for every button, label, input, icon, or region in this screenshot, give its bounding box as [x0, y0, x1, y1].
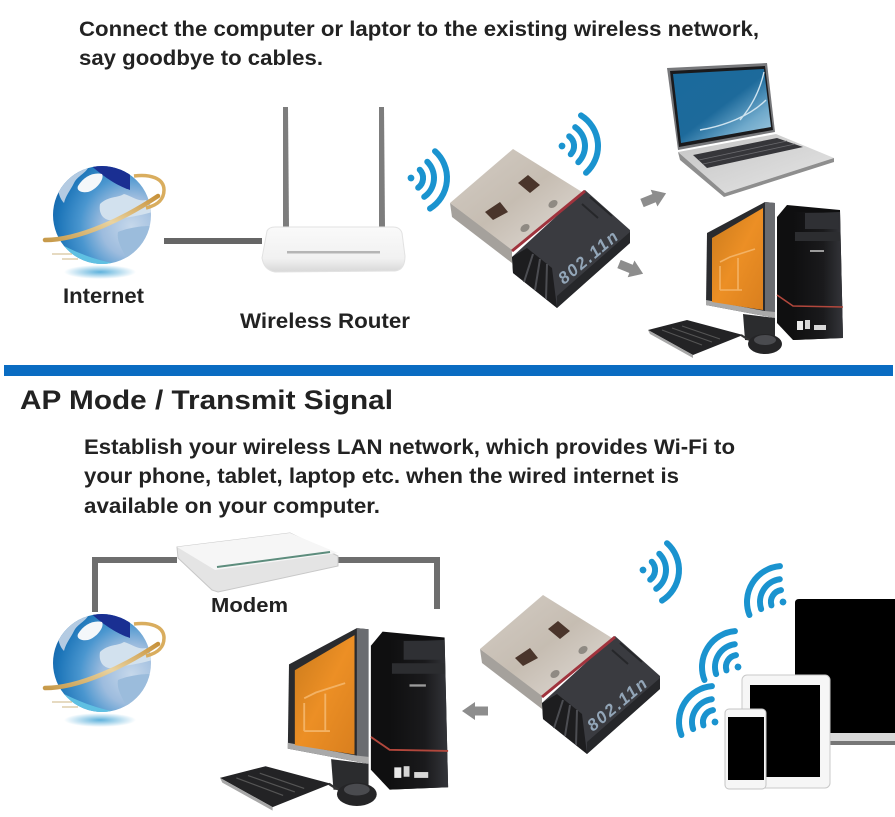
icon: wireless router — [262, 107, 405, 272]
icon: laptop — [667, 63, 834, 197]
icon: modem — [177, 533, 338, 592]
icon: laptop with black screen — [795, 599, 895, 745]
text block: ap mode description — [84, 436, 735, 518]
icon: globe internet — [45, 160, 164, 279]
label: wireless router: Wireless Router — [240, 310, 410, 333]
cables: globe to modem to computer — [95, 560, 437, 612]
icon: usb wifi dongle: 802.11n — [554, 227, 622, 288]
icon: wifi signal above dongle — [637, 541, 681, 602]
icon: globe — [45, 608, 164, 727]
icon: desktop computer — [220, 628, 448, 811]
heading: section one description: say goodbye to cables. — [79, 47, 323, 70]
heading: section one description — [79, 18, 759, 70]
icon: desktop computer — [648, 202, 843, 358]
icon: usb wifi dongle — [480, 595, 660, 754]
arrow: to laptop — [639, 185, 669, 211]
divider band — [4, 365, 893, 376]
icon: wifi signal to phone — [669, 678, 733, 748]
icon: wifi signal to tablet — [692, 623, 756, 693]
arrow: dongle to computer — [462, 702, 488, 720]
arrow: to desktop — [616, 256, 646, 282]
label: internet: Internet — [63, 285, 144, 308]
icon: wifi signal left of dongle — [405, 149, 449, 210]
icon: wifi signal right of dongle — [556, 114, 600, 175]
icon: usb wifi dongle: 802.11n — [583, 674, 651, 735]
text block: ap mode description: your phone, tablet, laptop etc. when the wired internet is — [84, 465, 679, 488]
cable: globe to router — [164, 238, 262, 244]
icon: tablet — [742, 675, 830, 788]
icon: usb wifi dongle — [450, 149, 630, 308]
text block: ap mode description: available on your computer. — [84, 495, 380, 518]
heading: section one description: Connect the computer or laptor to the existing wireless network, — [79, 18, 759, 41]
label: modem: Modem — [211, 595, 288, 617]
icon: wifi signal to laptop — [737, 558, 801, 628]
icon: phone — [725, 709, 766, 789]
text block: ap mode description: Establish your wireless LAN network, which provides Wi-Fi to — [84, 436, 735, 459]
heading: ap mode: AP Mode / Transmit Signal — [20, 385, 393, 415]
